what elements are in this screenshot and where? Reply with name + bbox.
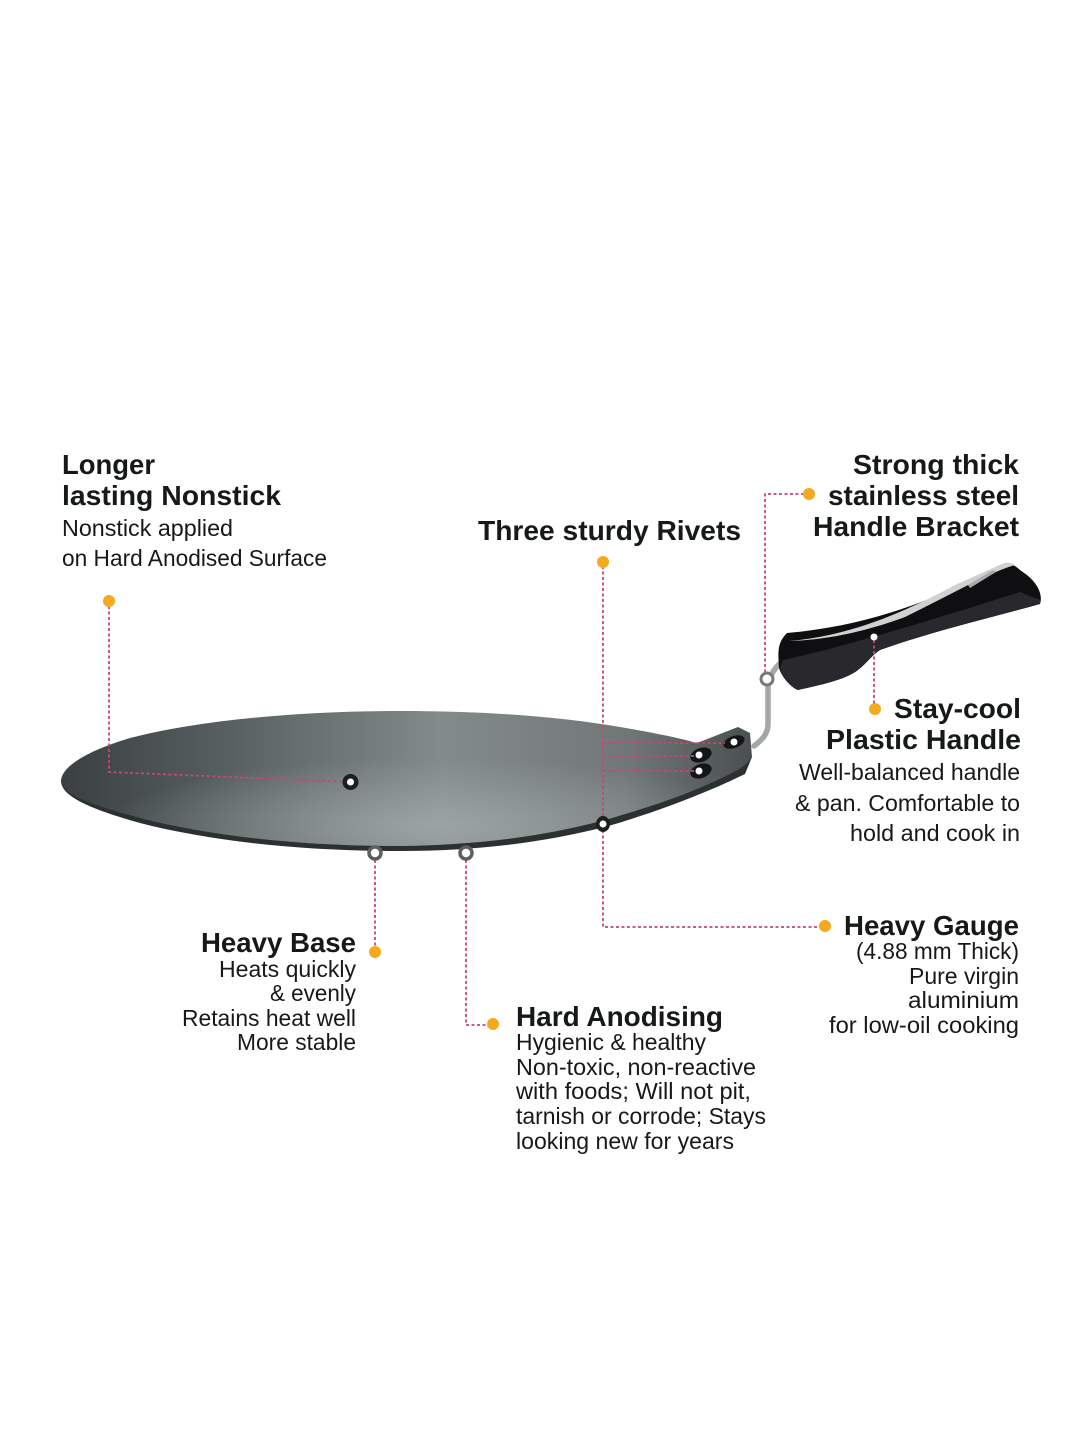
callout: handle bracket bbox=[765, 449, 1019, 672]
callout: heavy base bbox=[182, 847, 381, 1055]
callout: stay-cool plastic handle bbox=[795, 634, 1021, 846]
handle bracket rod bbox=[754, 662, 782, 746]
callout: longer lasting nonstick: Longer bbox=[62, 449, 155, 480]
callout: longer lasting nonstick: lasting Nonstick bbox=[62, 480, 281, 511]
callout: hard anodising: Non-toxic, non-reactive bbox=[516, 1054, 756, 1080]
handle slit bbox=[968, 570, 996, 588]
callout: longer lasting nonstick: on Hard Anodised Surface bbox=[62, 545, 327, 571]
callout: heavy base: Heats quickly bbox=[219, 956, 356, 982]
callout: heavy gauge bbox=[596, 816, 1019, 1038]
callout: hard anodising: looking new for years bbox=[516, 1128, 734, 1154]
callout: handle bracket: stainless steel bbox=[828, 480, 1019, 511]
callout: stay-cool plastic handle: Plastic Handle bbox=[826, 724, 1021, 755]
pan with handle bbox=[61, 563, 1041, 851]
callout: stay-cool plastic handle: Stay-cool bbox=[894, 693, 1021, 724]
callout: heavy gauge: aluminium bbox=[908, 987, 1019, 1013]
callout: heavy base: Retains heat well bbox=[182, 1005, 356, 1031]
callout: handle bracket: Handle Bracket bbox=[813, 511, 1019, 542]
callout: hard anodising: Hard Anodising bbox=[516, 1001, 723, 1032]
callout: hard anodising: Hygienic & healthy bbox=[516, 1029, 706, 1055]
callout: handle bracket: Strong thick bbox=[853, 449, 1019, 480]
bracket tab rivet marks bbox=[688, 733, 746, 781]
pan surface bbox=[61, 711, 752, 846]
callout: longer lasting nonstick bbox=[62, 449, 358, 790]
bracket ring bbox=[761, 673, 773, 685]
handle steel strip bbox=[789, 563, 1015, 641]
callout: stay-cool plastic handle: hold and cook in bbox=[850, 820, 1020, 846]
callout: heavy gauge: Heavy Gauge bbox=[844, 910, 1019, 941]
callout: longer lasting nonstick: Nonstick applied bbox=[62, 515, 233, 541]
callout: heavy base: & evenly bbox=[270, 980, 356, 1006]
pan base edge bbox=[61, 757, 752, 851]
callout: heavy base: Heavy Base bbox=[201, 927, 356, 958]
handle bbox=[778, 564, 1041, 690]
callout: hard anodising: with foods; Will not pit, bbox=[515, 1078, 751, 1104]
callout: heavy base: More stable bbox=[237, 1029, 356, 1055]
callout: stay-cool plastic handle: & pan. Comfortable to bbox=[795, 790, 1020, 816]
callout: hard anodising: tarnish or corrode; Stays bbox=[516, 1103, 766, 1129]
callout: heavy gauge: for low-oil cooking bbox=[829, 1012, 1019, 1038]
callout: hard anodising bbox=[460, 847, 766, 1154]
callout: three sturdy rivets: Three sturdy Rivets bbox=[478, 515, 741, 546]
callout: heavy gauge: (4.88 mm Thick) bbox=[856, 938, 1019, 964]
handle lower facet bbox=[780, 592, 1040, 690]
callout: heavy gauge: Pure virgin bbox=[909, 963, 1019, 989]
pan highlight bbox=[61, 711, 730, 846]
callout: stay-cool plastic handle: Well-balanced handle bbox=[799, 759, 1020, 785]
callout: three sturdy rivets bbox=[478, 515, 741, 818]
